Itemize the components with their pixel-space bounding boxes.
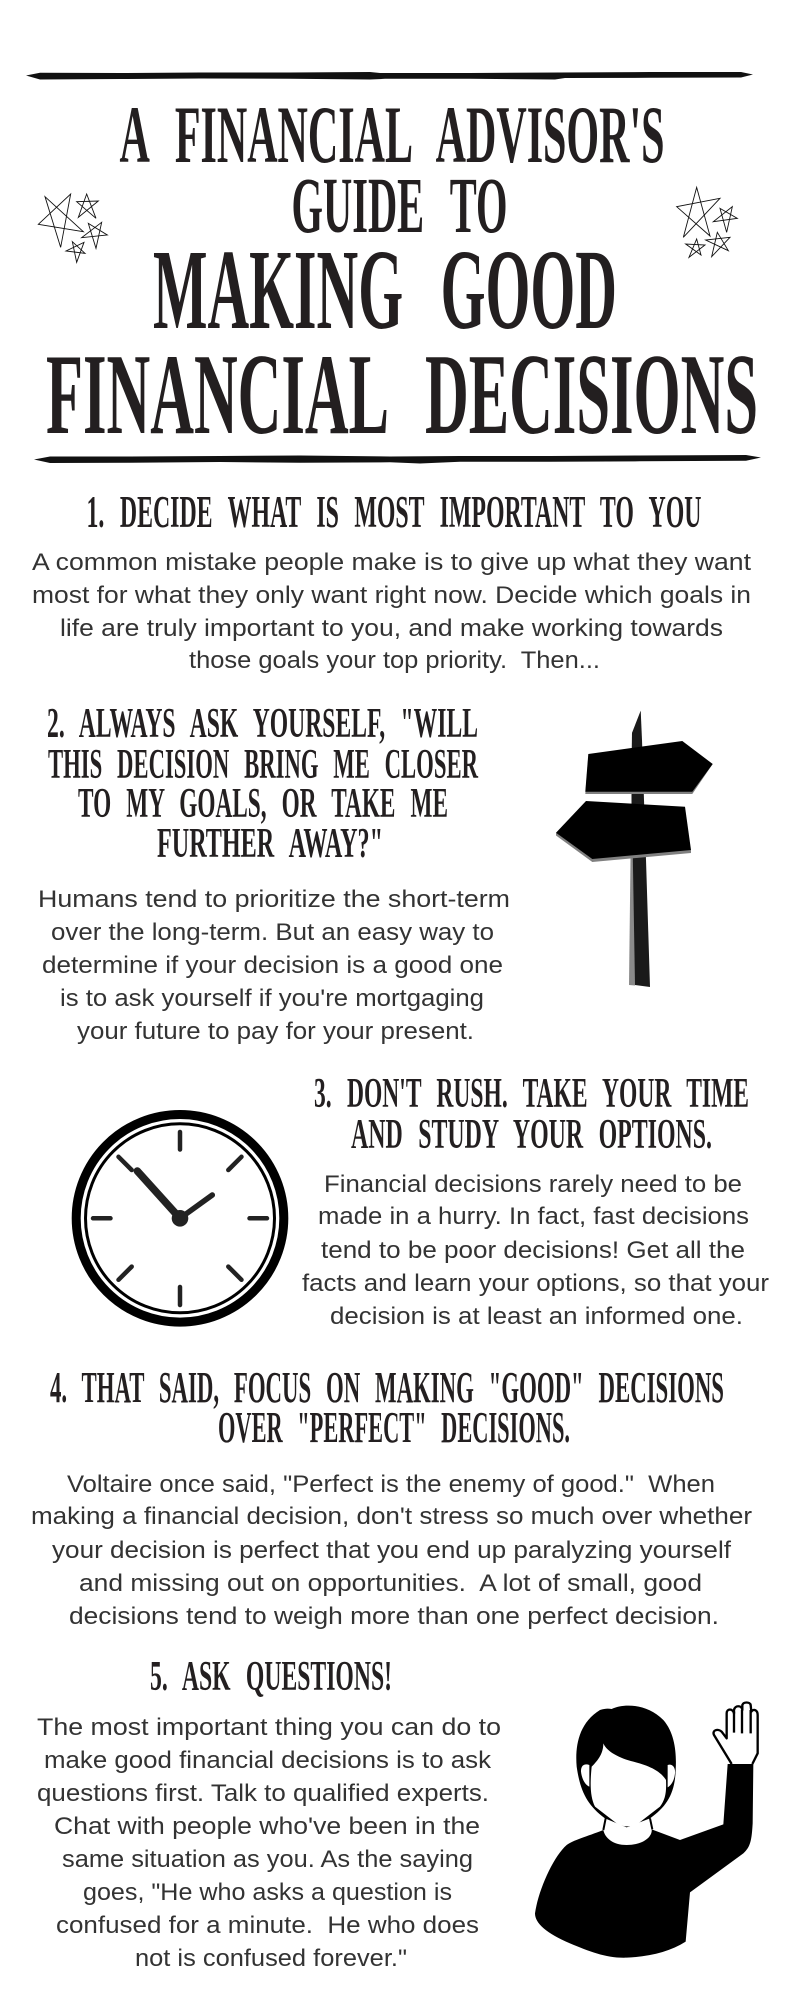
heading 2 xyxy=(47,701,478,867)
body text 2 xyxy=(38,886,510,1045)
section 2: always ask yourself xyxy=(38,701,713,1045)
body text 3 xyxy=(302,1171,769,1330)
body text 4: making a financial decision, don't stress so much over whether xyxy=(31,1503,752,1530)
icon: stars left xyxy=(38,194,107,262)
body text 3: facts and learn your options, so that your xyxy=(302,1270,769,1297)
body text 5 xyxy=(37,1714,501,1972)
section 4: good over perfect xyxy=(31,1363,752,1630)
bottom brush line xyxy=(34,455,761,464)
body text 2: over the long-term. But an easy way to xyxy=(51,919,494,946)
body text 2: is to ask yourself if you're mortgaging xyxy=(60,985,484,1012)
body text 1 xyxy=(32,549,751,674)
body text 4: decisions tend to weigh more than one perfect decision. xyxy=(69,1603,719,1630)
top brush line xyxy=(26,72,753,80)
body text 1: most for what they only want right now. Decide which goals in xyxy=(32,582,751,609)
body text 5: not is confused forever." xyxy=(135,1945,407,1972)
body text 3: tend to be poor decisions! Get all the xyxy=(321,1237,745,1264)
body text 1: life are truly important to you, and make working towards xyxy=(60,615,723,642)
body text 4: and missing out on opportunities. A lot of small, good xyxy=(79,1570,702,1597)
heading 2: TO MY GOALS, OR TAKE ME xyxy=(78,781,448,827)
body text 4: Voltaire once said, "Perfect is the enemy of good." When xyxy=(67,1471,715,1498)
body text 3: Financial decisions rarely need to be xyxy=(324,1171,742,1198)
body text 5: goes, "He who asks a question is xyxy=(83,1879,452,1906)
body text 4: your decision is perfect that you end up paralyzing yourself xyxy=(52,1537,731,1564)
body text 5: The most important thing you can do to xyxy=(37,1714,501,1741)
body text 5: confused for a minute. He who does xyxy=(56,1912,479,1939)
icon: signpost xyxy=(556,711,713,987)
title: GUIDE TO xyxy=(292,163,508,250)
body text 4 xyxy=(31,1471,752,1630)
heading 2: FURTHER AWAY?" xyxy=(157,821,383,867)
body text 5: questions first. Talk to qualified experts. xyxy=(37,1780,489,1807)
section 3: don't rush xyxy=(76,1071,769,1330)
body text 3: made in a hurry. In fact, fast decisions xyxy=(318,1203,749,1230)
heading 5: 5. ASK QUESTIONS! xyxy=(150,1654,392,1700)
section 5: ask questions xyxy=(37,1654,758,1972)
icon: stars right xyxy=(677,187,737,257)
body text 1: those goals your top priority. Then... xyxy=(189,647,600,674)
section 1: decide what is most important xyxy=(32,487,751,674)
heading 4 xyxy=(50,1363,724,1452)
icon: person raising hand xyxy=(535,1702,758,1958)
heading 3 xyxy=(314,1071,749,1158)
body text 3: decision is at least an informed one. xyxy=(330,1303,743,1330)
body text 5: same situation as you. As the saying xyxy=(62,1846,473,1873)
heading 2: 2. ALWAYS ASK YOURSELF, "WILL xyxy=(47,701,478,747)
body text 5: make good financial decisions is to ask xyxy=(44,1747,492,1774)
body text 1: A common mistake people make is to give up what they want xyxy=(32,549,751,576)
icon: clock xyxy=(76,1114,284,1322)
title xyxy=(46,89,758,459)
header banner xyxy=(26,72,761,464)
body text 2: Humans tend to prioritize the short-term xyxy=(38,886,510,913)
body text 2: your future to pay for your present. xyxy=(77,1018,474,1045)
body text 5: Chat with people who've been in the xyxy=(54,1813,480,1840)
body text 2: determine if your decision is a good one xyxy=(42,952,503,979)
